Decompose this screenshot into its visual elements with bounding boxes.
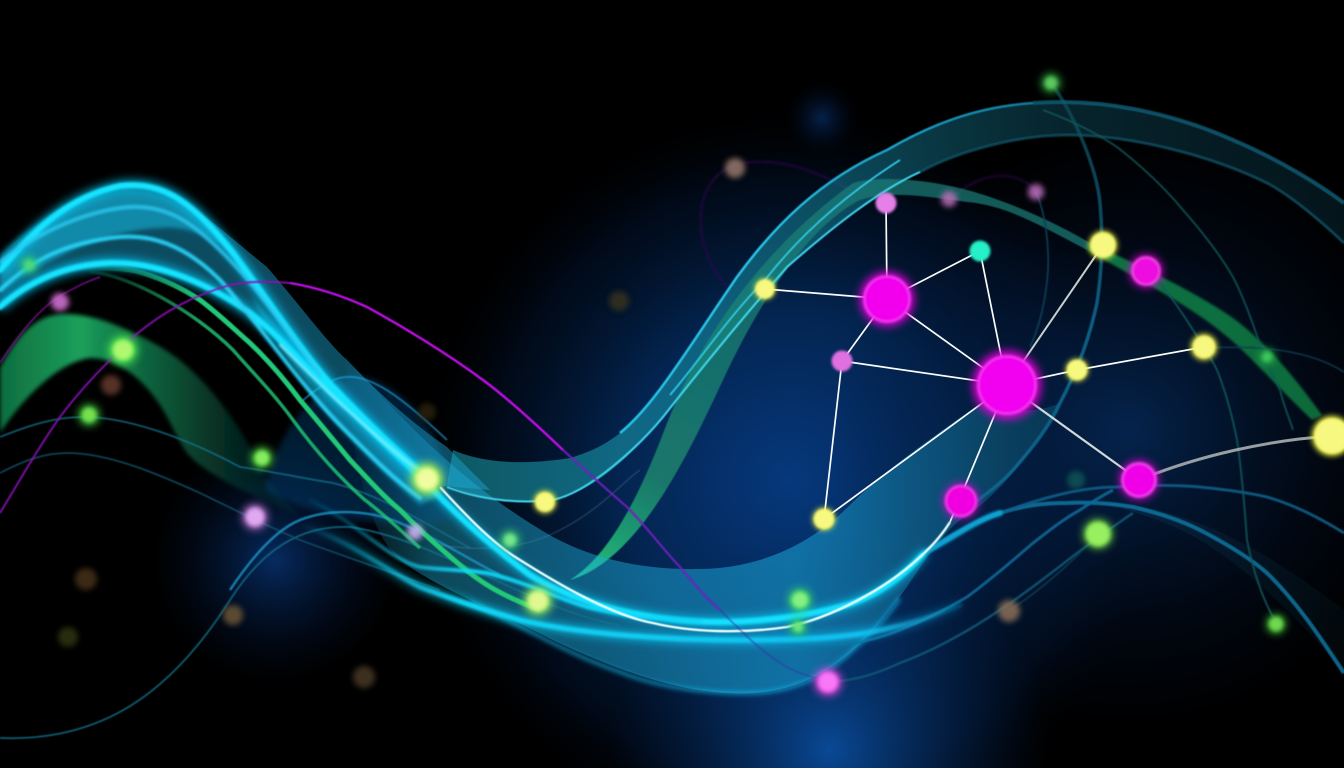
bright white strand xyxy=(440,487,950,631)
magenta hub: upper xyxy=(864,276,910,322)
yellow nodes xyxy=(536,232,1344,529)
pink node: left xyxy=(832,350,852,372)
network nodes xyxy=(534,192,1344,530)
yellow glows xyxy=(534,231,1344,530)
faint purple loops xyxy=(701,162,1036,290)
magenta hub: centre xyxy=(978,356,1036,414)
lower cyan bands xyxy=(300,475,1000,640)
cyan bundle glows xyxy=(0,185,430,485)
bundle soft inner band xyxy=(0,190,240,295)
green arc ribbon right xyxy=(1087,243,1322,420)
magenta hub glows xyxy=(860,255,1162,518)
right translucent ribbon xyxy=(1100,503,1344,673)
network edges xyxy=(765,203,1332,522)
green rising ribbon xyxy=(570,179,1090,580)
faint background nodes xyxy=(51,158,1085,688)
node glows xyxy=(21,74,1285,695)
tall blue arc xyxy=(950,83,1102,520)
green strands xyxy=(70,268,540,610)
left cyan wave bundle xyxy=(0,102,1344,682)
magenta node: right xyxy=(1122,463,1156,497)
glowing green and violet nodes xyxy=(21,74,1285,695)
lower cyan band glows xyxy=(300,475,960,640)
bundle soft lower band xyxy=(250,295,440,505)
magenta node: lower xyxy=(946,486,976,516)
node cores xyxy=(24,77,1283,692)
upper right translucent ribbon xyxy=(447,102,1344,502)
right side blue strands xyxy=(900,503,1344,673)
pink node: top xyxy=(876,192,896,214)
middle rising strands xyxy=(447,102,1344,501)
magenta node: top right xyxy=(1132,257,1160,285)
teal node xyxy=(970,240,990,262)
lower large cyan ribbon xyxy=(345,355,1060,693)
magenta curve xyxy=(0,277,828,682)
left green ribbon xyxy=(0,314,300,515)
lower ribbon glowing bottom edge xyxy=(470,598,900,693)
bundle upper fill xyxy=(0,183,490,490)
left translucent hump xyxy=(265,376,450,524)
cyan bundle strands xyxy=(0,185,430,498)
